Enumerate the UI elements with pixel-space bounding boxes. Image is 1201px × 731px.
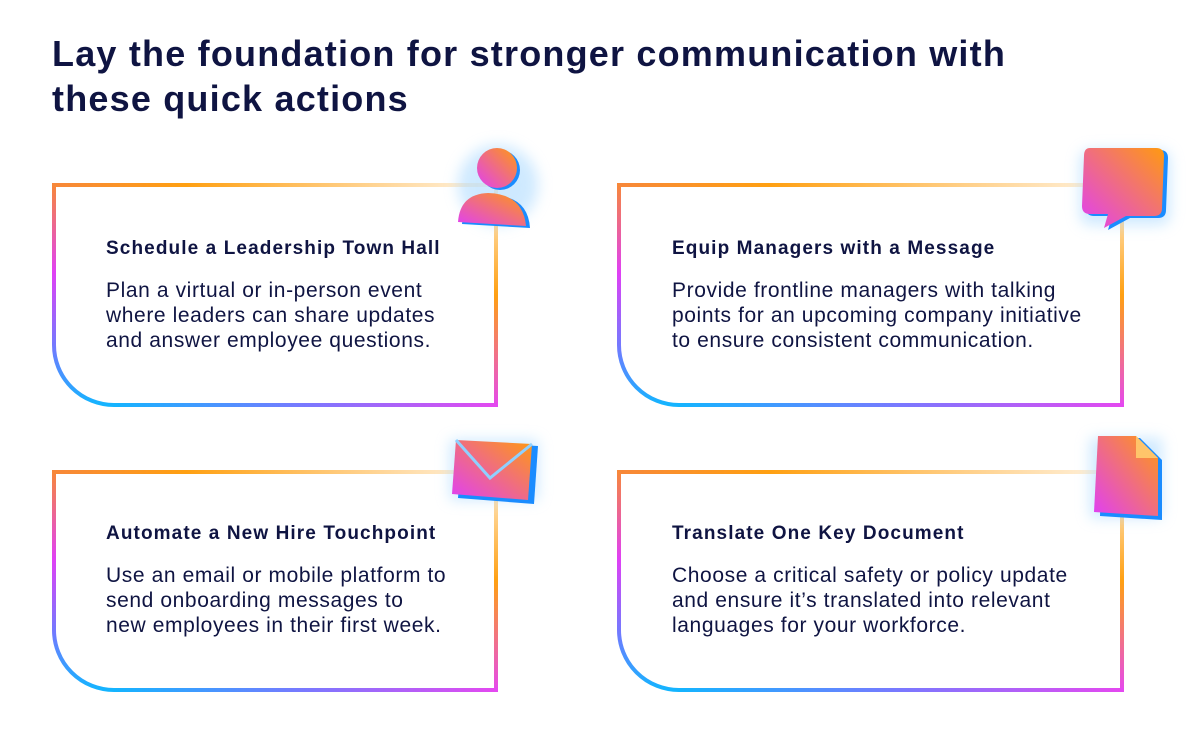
card 3 text: send onboarding messages to bbox=[106, 589, 404, 612]
card 2 text: Equip Managers with a Message bbox=[672, 238, 995, 259]
title: Lay the foundation for stronger communication with bbox=[52, 33, 1006, 74]
card 2 text: Provide frontline managers with talking bbox=[672, 279, 1056, 302]
card 3 text: new employees in their first week. bbox=[106, 614, 442, 637]
card 1 text: Schedule a Leadership Town Hall bbox=[106, 238, 441, 259]
icon: person bbox=[458, 145, 538, 228]
card 4 text: languages for your workforce. bbox=[672, 614, 966, 637]
card 2 text: points for an upcoming company initiative bbox=[672, 304, 1082, 327]
card 4 text: Choose a critical safety or policy update bbox=[672, 564, 1068, 587]
icon: envelope bbox=[450, 440, 538, 504]
card 3 text: Automate a New Hire Touchpoint bbox=[106, 523, 436, 544]
card 4 text: and ensure it’s translated into relevant bbox=[672, 589, 1050, 612]
icon: document bbox=[1090, 436, 1162, 520]
icon: chat bbox=[1080, 148, 1170, 230]
card 3 text: Use an email or mobile platform to bbox=[106, 564, 446, 587]
card frames bbox=[52, 183, 1124, 692]
card 4 text: Translate One Key Document bbox=[672, 523, 965, 544]
title bbox=[52, 33, 1006, 119]
title: these quick actions bbox=[52, 78, 409, 119]
card 1 text bbox=[106, 238, 441, 352]
card 1 text: Plan a virtual or in-person event bbox=[106, 279, 422, 302]
card 1 text: where leaders can share updates bbox=[106, 304, 435, 327]
card 4 text bbox=[672, 523, 1068, 637]
card 2 text: to ensure consistent communication. bbox=[672, 329, 1034, 352]
card 2 text bbox=[672, 238, 1082, 352]
card 3 text bbox=[106, 523, 446, 637]
card 1 text: and answer employee questions. bbox=[106, 329, 431, 352]
